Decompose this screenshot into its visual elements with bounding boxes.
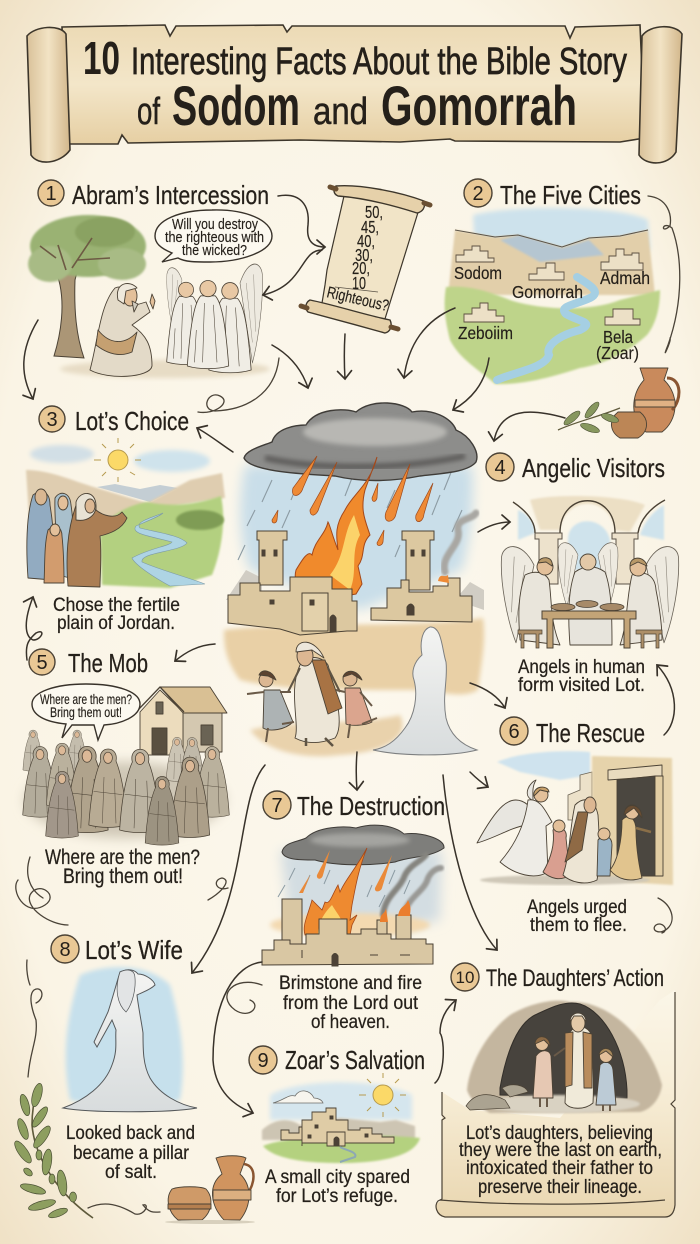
fact 7 heading: The Destruction bbox=[297, 791, 445, 821]
scroll of numbers bbox=[301, 186, 430, 333]
numbers: 20, bbox=[352, 258, 370, 278]
fact 6 heading bbox=[500, 717, 645, 748]
caption 5: Where are the men? bbox=[45, 846, 200, 869]
family bbox=[27, 489, 127, 587]
scroll body bbox=[322, 196, 420, 322]
fact 9 heading: 9 bbox=[257, 1050, 269, 1072]
fact 10 heading bbox=[451, 963, 664, 992]
small tower fires bbox=[380, 900, 410, 922]
sky wash bbox=[270, 1082, 412, 1120]
fact 2 heading: 2 bbox=[472, 183, 484, 205]
fact 8 heading bbox=[51, 935, 183, 965]
caption 4: Angels in human bbox=[518, 656, 645, 678]
caption 10 text: they were the last on earth, bbox=[459, 1140, 662, 1161]
rain bbox=[238, 470, 462, 560]
smoke bbox=[444, 513, 476, 572]
house bbox=[138, 687, 227, 755]
sky bbox=[473, 208, 650, 250]
stone wall bbox=[592, 756, 673, 885]
warm horizon bbox=[270, 913, 430, 937]
fact 5 heading: The Mob bbox=[68, 648, 148, 678]
flames bbox=[304, 848, 367, 935]
fact 2 heading bbox=[464, 179, 641, 210]
smoke bbox=[383, 855, 426, 915]
caption 7: of heaven. bbox=[311, 1011, 390, 1033]
icon: olive branch bottom left bbox=[12, 1082, 93, 1220]
fact 7 heading bbox=[263, 791, 445, 821]
illustration: Abram under tree with angels bbox=[28, 210, 272, 378]
green valley bbox=[445, 287, 660, 384]
sky wash bbox=[280, 850, 442, 930]
speech bubble: the righteous with bbox=[165, 229, 264, 246]
big flame bbox=[295, 457, 377, 596]
caption 8: of salt. bbox=[105, 1161, 157, 1183]
city labels: Gomorrah bbox=[512, 282, 583, 302]
lintel and door bbox=[608, 765, 663, 876]
caption 6 bbox=[527, 896, 627, 936]
Abram kneeling bbox=[90, 284, 155, 376]
rock bbox=[467, 1001, 662, 1113]
caption 9: for Lot’s refuge. bbox=[276, 1185, 398, 1207]
fact 3 heading bbox=[39, 406, 189, 436]
caption 9 bbox=[265, 1166, 410, 1207]
speech bubble bbox=[155, 210, 272, 262]
illustration: map of the five cities bbox=[445, 208, 660, 384]
meteors bbox=[299, 850, 392, 893]
icon: olive branch bbox=[558, 400, 620, 435]
caption 3: plain of Jordan. bbox=[57, 612, 175, 634]
caption 4 bbox=[518, 656, 645, 696]
numbers: 40, bbox=[357, 231, 375, 251]
ground bbox=[224, 618, 484, 694]
fact 5 heading bbox=[29, 648, 148, 678]
caption 8 bbox=[66, 1122, 195, 1183]
three angels bbox=[167, 264, 263, 373]
cloud bbox=[273, 1091, 323, 1103]
numbers bbox=[325, 202, 390, 315]
numbers: 45, bbox=[361, 217, 379, 237]
caption 8: Looked back and bbox=[66, 1122, 195, 1144]
left roller bbox=[27, 27, 70, 162]
city labels bbox=[454, 263, 650, 363]
pillar of salt wife bbox=[373, 627, 477, 755]
speech bubble: Where are the men? bbox=[40, 692, 132, 707]
caption 6: them to flee. bbox=[530, 914, 627, 936]
arrows connecting the facts bbox=[16, 195, 680, 1214]
sky bbox=[497, 751, 590, 780]
city labels: Zeboiim bbox=[458, 323, 513, 343]
fact 2 heading: The Five Cities bbox=[500, 180, 641, 210]
small fire bbox=[438, 575, 449, 583]
caption 10 text: Lot’s daughters, believing bbox=[466, 1123, 653, 1144]
caption 5 bbox=[45, 846, 200, 888]
columns bbox=[535, 533, 638, 584]
title line 2 bbox=[137, 74, 577, 137]
small tree bbox=[176, 510, 224, 530]
path bbox=[340, 1147, 355, 1162]
caption 8: became a pillar bbox=[73, 1142, 189, 1164]
top roller bbox=[334, 186, 425, 213]
angels bbox=[501, 543, 679, 645]
arches bbox=[513, 500, 665, 533]
illustration: the mob at Lot's door bbox=[23, 684, 229, 845]
title banner bbox=[27, 25, 682, 163]
fact 9 heading: Zoar’s Salvation bbox=[285, 1045, 425, 1075]
rocks bbox=[466, 1085, 528, 1110]
city labels: Sodom bbox=[454, 263, 502, 283]
hills bbox=[26, 470, 225, 530]
smoke right bbox=[405, 868, 441, 910]
sky wash bbox=[240, 465, 473, 610]
mountain ridge bbox=[455, 230, 648, 247]
numbers: 30, bbox=[355, 245, 373, 265]
fact 10 heading: 10 bbox=[456, 968, 474, 987]
right city bbox=[371, 531, 472, 622]
caption 4: form visited Lot. bbox=[518, 674, 645, 696]
icon: ground shadow bbox=[165, 1220, 255, 1224]
caption 3: Chose the fertile bbox=[53, 594, 180, 616]
hair bbox=[117, 970, 135, 1012]
distant hills bbox=[226, 570, 484, 610]
river bbox=[132, 513, 205, 586]
angel bbox=[477, 780, 552, 876]
numbers: Righteous? bbox=[325, 284, 390, 315]
banner ribbon bbox=[62, 25, 645, 144]
mountains bbox=[448, 230, 655, 295]
cloud bbox=[282, 825, 444, 865]
caption 10 text: intoxicated their father to bbox=[466, 1158, 653, 1179]
icon: bottom jug bbox=[212, 1156, 254, 1220]
caption 9: A small city spared bbox=[265, 1166, 410, 1188]
table bbox=[542, 611, 636, 648]
sky through arches bbox=[518, 505, 664, 570]
caption 7: Brimstone and fire bbox=[279, 972, 422, 994]
hills bbox=[262, 1118, 415, 1140]
fact 8 heading: 8 bbox=[59, 939, 71, 961]
panel border bbox=[436, 992, 675, 1217]
illustration: cave bbox=[466, 1001, 662, 1113]
illustration: pillar of salt bbox=[63, 967, 197, 1112]
numbers: 10 bbox=[352, 273, 366, 293]
bottom roller bbox=[306, 300, 391, 333]
roller knobs bbox=[301, 187, 430, 329]
fact 5 heading: 5 bbox=[36, 652, 48, 674]
illustration: angels lead Lot's family away bbox=[477, 751, 673, 885]
wall wash bbox=[530, 496, 645, 532]
tree bbox=[28, 215, 146, 358]
fact 7 heading: 7 bbox=[271, 795, 283, 817]
sun bbox=[94, 438, 141, 482]
fact 3 heading: Lot’s Choice bbox=[75, 406, 189, 436]
title line 2: Sodom bbox=[172, 74, 300, 137]
fact 1 heading: Abram’s Intercession bbox=[72, 180, 269, 210]
ground wash bbox=[60, 360, 270, 378]
caption 6: Angels urged bbox=[527, 896, 627, 918]
ruin wall bbox=[568, 772, 592, 820]
city bbox=[262, 899, 433, 966]
caption panel 10 backing bbox=[436, 990, 675, 1217]
title line 2: and bbox=[313, 91, 368, 133]
Lot bbox=[288, 642, 342, 746]
girl left bbox=[247, 671, 294, 742]
flame core bbox=[330, 515, 360, 590]
cloud highlight bbox=[310, 833, 410, 847]
Lot and daughters bbox=[533, 1013, 616, 1111]
speech bubble: the wicked? bbox=[182, 242, 247, 259]
icon: bottom pot bbox=[168, 1187, 211, 1220]
cloud shadows bbox=[265, 456, 465, 467]
fact 1 heading: 1 bbox=[45, 183, 57, 205]
sky clouds right bbox=[134, 450, 210, 472]
caption 3 bbox=[53, 594, 180, 634]
cities bbox=[456, 246, 643, 325]
cave floor bbox=[480, 1095, 640, 1113]
dishes bbox=[551, 600, 624, 610]
storm cloud bbox=[244, 403, 477, 480]
illustration: Lot's choice of the plain bbox=[26, 438, 225, 588]
caption 10 text: preserve their lineage. bbox=[478, 1177, 642, 1198]
fact 4 heading: Angelic Visitors bbox=[522, 453, 665, 483]
speech bubble: Bring them out! bbox=[50, 705, 122, 720]
title line 1 number: 10 bbox=[83, 32, 120, 84]
central scene: destruction and flight bbox=[224, 403, 484, 756]
green plain bbox=[100, 496, 223, 588]
fact 8 heading: Lot’s Wife bbox=[85, 935, 183, 965]
speech bubble bbox=[32, 684, 140, 740]
lower ground patch bbox=[250, 715, 402, 756]
illustration: Zoar city bbox=[262, 1073, 420, 1163]
right roller bbox=[639, 27, 682, 163]
numbers: 50, bbox=[365, 202, 383, 222]
family bbox=[543, 797, 651, 883]
city labels: (Zoar) bbox=[596, 343, 639, 363]
sky clouds bbox=[30, 445, 94, 463]
crowd shadow bbox=[25, 762, 225, 838]
caption 10 text bbox=[459, 1123, 662, 1198]
meadow bbox=[263, 1136, 420, 1163]
fact 3 heading: 3 bbox=[46, 409, 58, 431]
title line 2: of bbox=[137, 91, 160, 133]
fact 6 heading: 6 bbox=[508, 721, 520, 743]
fact 9 heading bbox=[249, 1045, 425, 1075]
river bbox=[497, 277, 595, 380]
ground bbox=[480, 875, 650, 885]
sky wash bbox=[66, 967, 183, 1106]
fact 4 heading: 4 bbox=[494, 457, 506, 479]
meteors bbox=[272, 456, 433, 546]
title line 2: Gomorrah bbox=[381, 74, 577, 137]
illustration: angels at Lot's table bbox=[501, 496, 679, 648]
sun bbox=[359, 1073, 406, 1117]
icon: clay jug bbox=[634, 368, 679, 432]
speech bubble: Will you destroy bbox=[172, 216, 258, 233]
girl right bbox=[336, 671, 377, 738]
city labels: Admah bbox=[600, 268, 650, 288]
fact 4 heading bbox=[486, 453, 665, 483]
city bbox=[281, 1108, 394, 1146]
illustration: smaller destruction scene bbox=[262, 825, 444, 966]
caption 5: Bring them out! bbox=[63, 865, 183, 888]
fact 6 heading: The Rescue bbox=[536, 718, 645, 748]
icon: small pot bbox=[611, 412, 647, 438]
cloud shading bbox=[303, 418, 447, 446]
distant mountains bbox=[97, 484, 178, 502]
flame core bbox=[318, 905, 345, 934]
cave mouth bbox=[500, 1003, 627, 1098]
stools bbox=[518, 630, 662, 648]
caption 7 bbox=[279, 972, 422, 1033]
crowd bbox=[23, 730, 229, 845]
city labels: Bela bbox=[603, 327, 633, 347]
rain bbox=[278, 868, 410, 907]
salt figure bbox=[63, 970, 197, 1112]
left city bbox=[228, 531, 357, 635]
caption 7: from the Lord out bbox=[283, 992, 419, 1014]
